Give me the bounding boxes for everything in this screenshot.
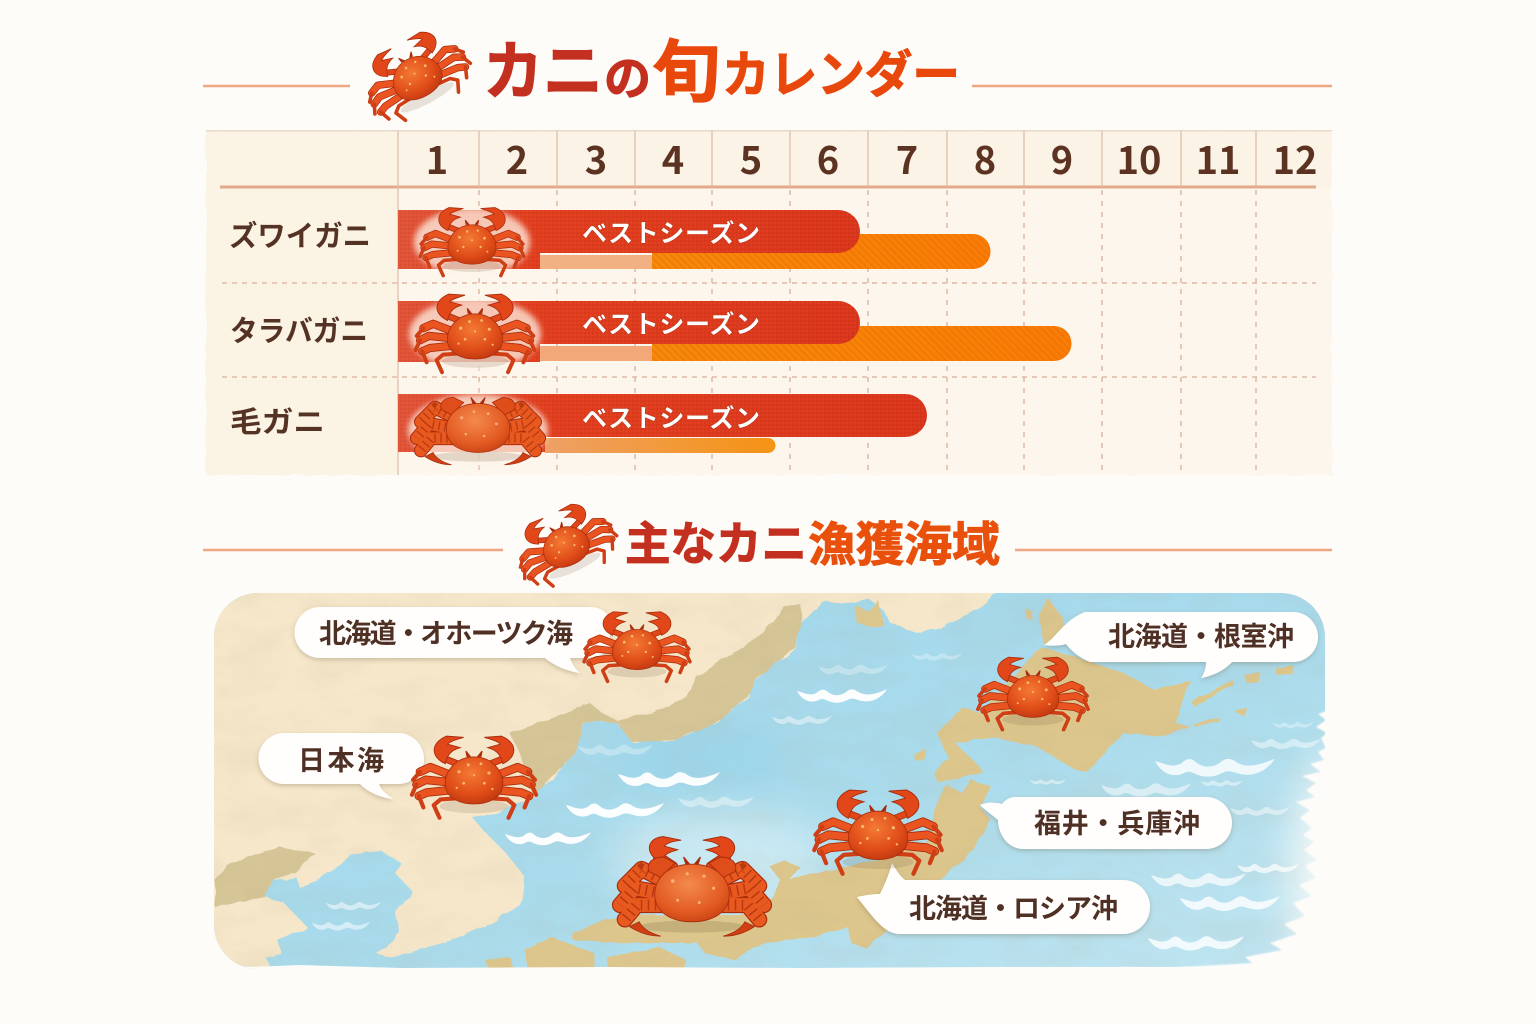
row: 毛ガニ: 毛ガニ: [230, 406, 325, 439]
icon: crab Sea of Japan: [412, 736, 536, 818]
month numbers: 5: [740, 130, 762, 185]
heading: fishing areas title: 主なカニ: [625, 518, 807, 570]
month numbers: 7: [896, 130, 918, 185]
row: 毛ガニ: [230, 394, 927, 466]
month numbers: 8: [974, 130, 996, 185]
month numbers: 10: [1117, 130, 1161, 185]
row: ズワイガニ: ズワイガニ: [229, 219, 371, 253]
sea: [214, 593, 1325, 969]
callout: 北海道・根室沖: [1044, 612, 1318, 678]
callout: 北海道・ロシア沖: [857, 863, 1150, 934]
month numbers: 12: [1273, 130, 1317, 185]
heading: calendar title: カレンダー: [722, 47, 960, 103]
waves: [312, 653, 1321, 951]
callout: 福井・兵庫沖: 福井・兵庫沖: [1034, 809, 1200, 839]
land: Japan: [485, 598, 1294, 975]
panel: season calendar: [206, 130, 1332, 475]
land: Sakhalin tip: [855, 600, 884, 627]
callout: 北海道・ロシア沖: 北海道・ロシア沖: [909, 894, 1118, 924]
land: west dark coast: [215, 847, 315, 907]
heading: fishing areas title: [203, 518, 1332, 571]
panel: map: [214, 593, 1325, 969]
callout: 日本海: 日本海: [298, 746, 384, 776]
callout: 北海道・根室沖: 北海道・根室沖: [1108, 622, 1294, 652]
torn bottom edge: [244, 965, 1192, 969]
icon: crab Okhotsk: [584, 612, 690, 681]
icon: hairy crab: [620, 837, 764, 936]
month numbers: 4: [662, 130, 684, 185]
month numbers: 1: [426, 130, 448, 185]
header rule: [220, 186, 1316, 188]
heading: calendar title: カニ: [483, 36, 603, 108]
month numbers: 2: [506, 130, 528, 185]
callout: 北海道・オホーツク海: [294, 607, 610, 673]
month numbers: 3: [585, 130, 607, 185]
icon: section crab: [505, 492, 625, 596]
watercolor texture: [214, 593, 1325, 969]
callout: 北海道・オホーツク海: 北海道・オホーツク海: [319, 619, 573, 649]
month numbers: [426, 130, 1317, 185]
row: ズワイガニ: [229, 208, 990, 276]
row: タラバガニ: [230, 294, 1072, 372]
land: mainland cream: [200, 585, 1000, 975]
month numbers: 11: [1196, 130, 1240, 185]
brushed right edge: [1120, 710, 1325, 969]
callout: 日本海: [259, 733, 424, 799]
month numbers: 9: [1051, 130, 1073, 185]
icon: title crab: [351, 18, 480, 132]
grid: [222, 131, 1316, 475]
icon: crab Fukui Hyogo: [814, 790, 942, 874]
land: coastal strip: [510, 604, 803, 797]
callout: 福井・兵庫沖: [980, 797, 1232, 849]
heading: fishing areas title: 漁獲海域: [808, 518, 1000, 571]
icon: crab Nemuro: [978, 657, 1088, 730]
row: 毛ガニ: ベストシーズン: [582, 404, 760, 433]
heading: calendar title: [203, 35, 1332, 111]
calendar paper: [206, 131, 1332, 475]
month numbers: 6: [817, 130, 839, 185]
row: タラバガニ: タラバガニ: [230, 315, 368, 348]
heading: calendar title: の: [604, 52, 651, 105]
row: タラバガニ: ベストシーズン: [582, 310, 760, 339]
row: ズワイガニ: ベストシーズン: [582, 219, 760, 248]
heading: calendar title: 旬: [652, 35, 720, 111]
fade at lower right: [1270, 741, 1325, 940]
